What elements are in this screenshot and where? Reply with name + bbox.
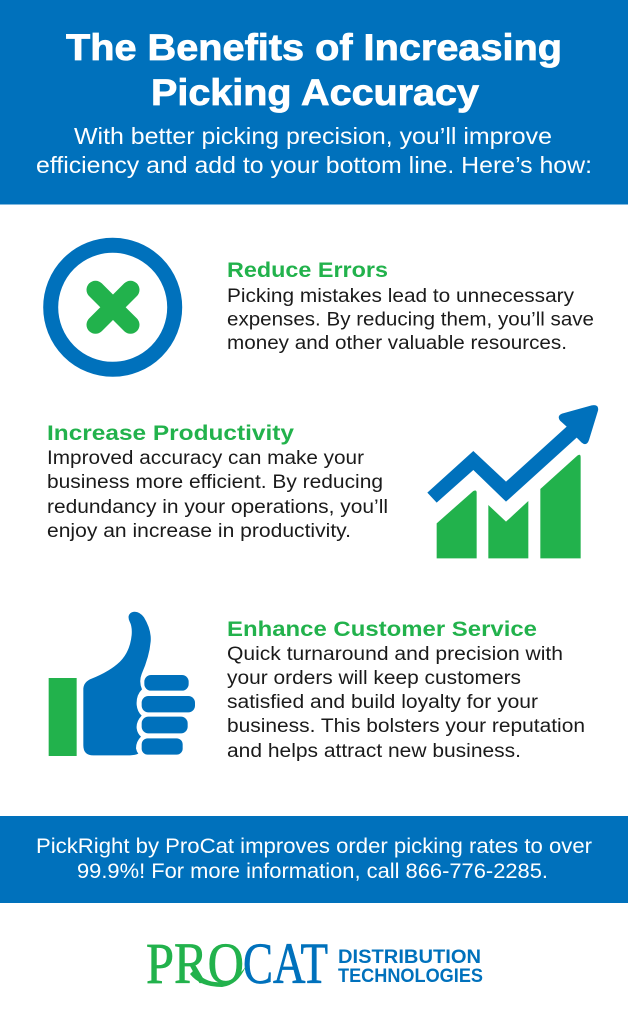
title: The Benefits of Increasing [66, 27, 562, 68]
text block: enhance customer service: your orders will keep customers [227, 668, 521, 689]
blue arrow [427, 405, 598, 503]
panel: increase productivity [47, 405, 598, 558]
heading: enhance customer service: Enhance Customer Service [227, 617, 537, 641]
text block: reduce errors [227, 286, 594, 354]
subtitle [36, 123, 592, 178]
text block: enhance customer service [227, 644, 585, 762]
panel: enhance customer service [49, 612, 585, 762]
text block: reduce errors: money and other valuable resources. [227, 333, 567, 354]
logo: ProCat Distribution Technologies: CAT [243, 931, 328, 996]
footer band call to action: 99.9%! For more information, call 866-776-2285. [77, 859, 548, 883]
text block: reduce errors: expenses. By reducing them, you’ll save [227, 310, 594, 330]
cuff [49, 678, 77, 756]
icon: thumbs up [49, 612, 195, 756]
subtitle: With better picking precision, you’ll improve [74, 123, 552, 149]
text block: increase productivity: redundancy in your operations, you’ll [47, 497, 388, 518]
logo: ProCat Distribution Technologies: PRO [146, 931, 244, 996]
logo: ProCat Distribution Technologies: DISTRIBUTION [338, 947, 481, 968]
text block: enhance customer service: business. This bolsters your reputation [227, 716, 585, 737]
hand [83, 612, 195, 755]
green bars [437, 455, 581, 558]
logo: ProCat Distribution Technologies: TECHNOLOGIES [338, 966, 483, 987]
title: Picking Accuracy [151, 72, 479, 113]
panel: reduce errors [51, 245, 594, 369]
footer band call to action [0, 816, 628, 903]
text block: increase productivity: Improved accuracy can make your [47, 448, 365, 469]
icon: rising bar chart with arrow [427, 405, 598, 558]
text block: enhance customer service: and helps attract new business. [227, 741, 521, 762]
subtitle: efficiency and add to your bottom line. Here’s how: [36, 152, 592, 178]
icon: green X in blue circle [51, 245, 175, 369]
heading: increase productivity: Increase Productivity [47, 421, 294, 445]
text block: increase productivity [47, 448, 388, 542]
header panel [0, 0, 628, 204]
text block: enhance customer service: Quick turnaround and precision with [227, 644, 563, 665]
footer band call to action: PickRight by ProCat improves order picking rates to over [36, 834, 592, 858]
title [66, 27, 562, 113]
text block: reduce errors: Picking mistakes lead to unnecessary [227, 286, 575, 307]
text block: increase productivity: business more efficient. By reducing [47, 472, 383, 493]
text block: increase productivity: enjoy an increase in productivity. [47, 521, 351, 542]
text block: enhance customer service: satisfied and build loyalty for your [227, 692, 539, 713]
logo: ProCat Distribution Technologies [146, 931, 483, 996]
heading: reduce errors: Reduce Errors [227, 258, 388, 282]
